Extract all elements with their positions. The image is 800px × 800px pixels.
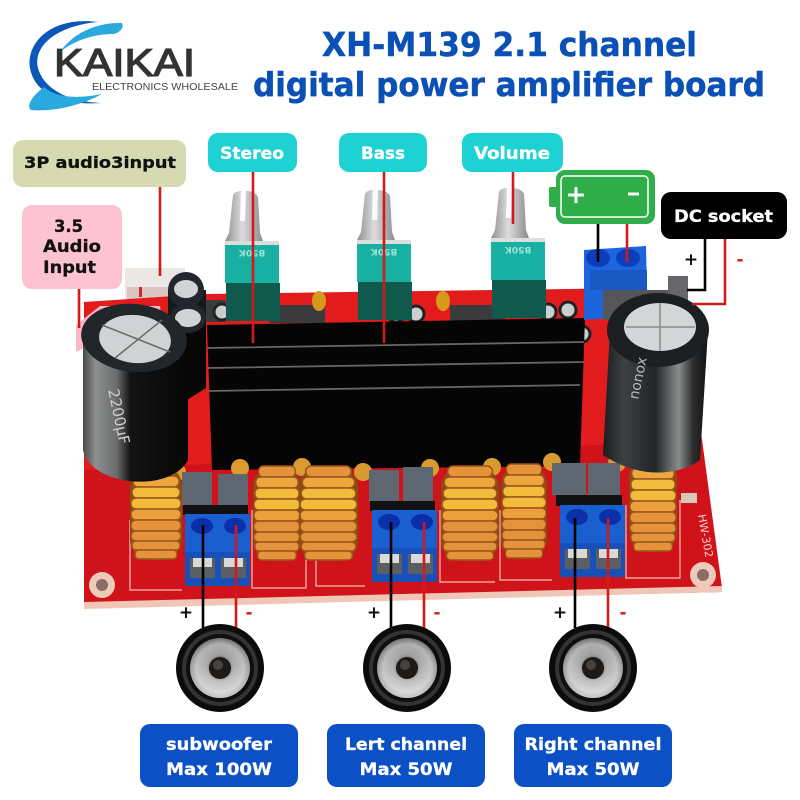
label: right channel xyxy=(514,724,672,787)
small capacitors near connector xyxy=(168,272,206,400)
label: 3.5 audio input xyxy=(22,205,122,289)
label: right channel: Right channel xyxy=(524,735,662,755)
potentiometer: bass xyxy=(357,190,412,320)
label: volume: Volume xyxy=(474,144,550,164)
label: subwoofer: Max 100W xyxy=(166,760,272,780)
speaker: left xyxy=(363,624,451,712)
logo xyxy=(29,21,238,110)
polarity marks: speakers: + xyxy=(367,603,381,623)
label: 3.5 audio input: Input xyxy=(43,258,96,278)
DC polarity marks: + xyxy=(684,250,698,270)
label: right channel: Max 50W xyxy=(546,760,640,780)
label: left channel xyxy=(327,724,485,787)
DC polarity marks: - xyxy=(736,250,744,270)
title: digital power amplifier board xyxy=(253,65,765,104)
left electrolytic capacitor xyxy=(78,299,190,482)
label: DC socket xyxy=(661,192,787,239)
potentiometer: stereo xyxy=(225,191,280,321)
leader lines xyxy=(79,172,725,628)
3P connector xyxy=(125,268,185,318)
label: stereo: Stereo xyxy=(220,144,284,164)
title: XH-M139 2.1 channel xyxy=(322,25,697,64)
logo: KAIKAI xyxy=(54,42,195,85)
label: 3.5 audio input: Audio xyxy=(43,237,101,257)
label: left channel: Max 50W xyxy=(360,760,453,780)
right electrolytic capacitor xyxy=(603,293,709,472)
title xyxy=(253,25,765,104)
polarity marks: speakers: - xyxy=(245,603,253,623)
polarity marks: speakers: + xyxy=(179,603,193,623)
speaker: right xyxy=(549,624,637,712)
label: bass: Bass xyxy=(361,144,405,164)
chips and small parts xyxy=(205,291,590,342)
label: volume xyxy=(462,133,563,172)
circuit board: HW-302 xyxy=(695,513,715,559)
polarity marks: speakers: - xyxy=(619,603,627,623)
label: stereo xyxy=(208,133,297,172)
label: 3.5 audio input: 3.5 xyxy=(54,217,83,237)
label: left channel: Lert channel xyxy=(345,735,467,755)
left electrolytic capacitor: 2200μF xyxy=(104,387,133,446)
logo: ELECTRONICS WHOLESALE xyxy=(92,82,238,93)
film capacitors xyxy=(182,463,622,515)
polarity marks: speakers xyxy=(179,603,627,623)
speaker terminal blocks xyxy=(185,505,625,586)
polarity marks: speakers: + xyxy=(553,603,567,623)
potentiometer: volume xyxy=(491,188,546,318)
power terminal block xyxy=(584,246,688,320)
label: bass xyxy=(339,133,427,172)
DC polarity marks xyxy=(684,250,744,270)
right electrolytic capacitor: nonox xyxy=(626,356,651,401)
toroid inductors xyxy=(130,457,677,561)
speaker: subwoofer xyxy=(176,624,264,712)
label: 3P audio input: 3P audio3input xyxy=(24,153,176,172)
label: subwoofer xyxy=(140,724,298,787)
polarity marks: speakers: - xyxy=(433,603,441,623)
orange beads xyxy=(168,453,626,481)
label: 3P audio input xyxy=(13,140,186,187)
label: DC socket: DC socket xyxy=(674,207,773,227)
label: subwoofer: subwoofer xyxy=(166,735,273,755)
circuit board xyxy=(76,288,722,609)
icon: battery xyxy=(549,170,655,224)
heat sink xyxy=(207,318,585,470)
